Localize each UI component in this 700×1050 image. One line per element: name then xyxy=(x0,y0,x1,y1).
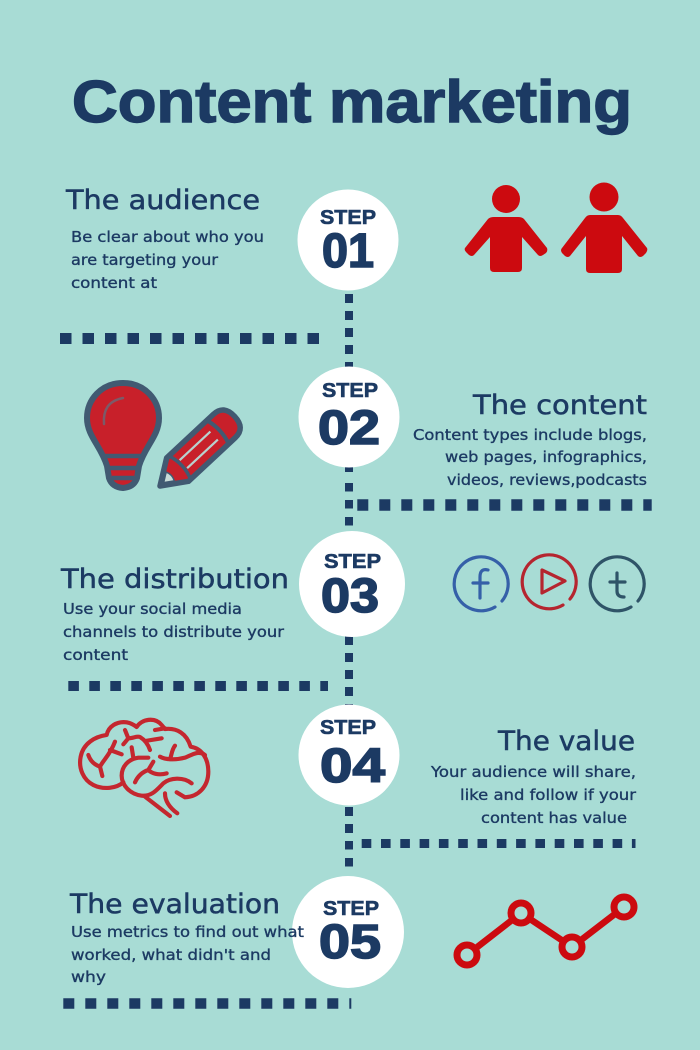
dotted divider 5 xyxy=(63,998,351,1009)
text: the audience: are targeting your xyxy=(71,251,219,269)
text: the audience: content at xyxy=(71,274,157,292)
text: the distribution: Use your social media xyxy=(63,600,242,618)
heading: the audience: The audience xyxy=(65,185,260,216)
icon: brain xyxy=(80,720,208,816)
text: the content: Content types include blogs, xyxy=(413,426,647,444)
icon: tumblr circle xyxy=(590,557,644,611)
step badge 03 xyxy=(299,531,405,637)
dotted divider 3 xyxy=(68,681,328,691)
step badge 01 xyxy=(298,190,398,290)
text: the evaluation: why xyxy=(71,968,106,986)
text: the content: web pages, infographics, xyxy=(445,448,647,466)
dotted divider 1 xyxy=(60,333,320,344)
dotted divider 4 xyxy=(362,839,636,848)
text: the audience xyxy=(71,228,264,292)
text: the evaluation: worked, what didn't and xyxy=(71,946,271,964)
text: the distribution xyxy=(63,600,285,664)
step badge 04: STEP xyxy=(320,716,376,739)
icon: line chart xyxy=(457,897,634,965)
text: the value: Your audience will share, xyxy=(430,763,636,781)
step badge 05: 05 xyxy=(319,916,381,969)
step badge 03: 03 xyxy=(321,570,379,623)
text: the value: like and follow if your xyxy=(460,786,637,804)
step badge 02: STEP xyxy=(322,379,378,402)
step badge 01: STEP xyxy=(320,206,376,229)
step badge 02: 02 xyxy=(318,402,380,455)
icon: facebook circle xyxy=(454,557,508,611)
step 02 section xyxy=(87,366,647,498)
step badge 05: STEP xyxy=(323,897,379,920)
text: the value: content has value xyxy=(481,809,627,827)
step badge 04 xyxy=(298,704,400,806)
step 05 section xyxy=(69,876,634,988)
text: the content: videos, reviews,podcasts xyxy=(447,471,647,489)
step 04 section xyxy=(80,704,637,827)
icon: pencil xyxy=(149,405,246,498)
step badge 05 xyxy=(292,876,404,988)
text: the distribution: channels to distribute your xyxy=(63,623,285,641)
title: Content marketing xyxy=(72,69,632,135)
step badge 02 xyxy=(298,366,400,468)
dotted vertical timeline xyxy=(345,294,353,866)
heading: the distribution: The distribution xyxy=(60,564,289,595)
step 03 section xyxy=(60,531,644,664)
heading: the evaluation: The evaluation xyxy=(69,889,280,920)
text: the evaluation: Use metrics to find out what xyxy=(71,923,304,941)
step badge 04: 04 xyxy=(320,740,385,793)
icon: light bulb xyxy=(87,383,159,488)
heading: the value: The value xyxy=(497,726,635,757)
text: the distribution: content xyxy=(63,646,128,664)
text: the evaluation xyxy=(71,923,304,986)
icon: play circle xyxy=(522,555,576,609)
heading: the content: The content xyxy=(472,390,647,421)
dotted divider 2 xyxy=(357,499,652,511)
text: the value xyxy=(430,763,637,827)
text: the content xyxy=(413,426,647,489)
step 01 section xyxy=(65,182,647,292)
icon: two people xyxy=(465,182,647,273)
step badge 01: 01 xyxy=(322,225,374,278)
step badge 03: STEP xyxy=(324,550,381,573)
text: the audience: Be clear about who you xyxy=(71,228,264,246)
